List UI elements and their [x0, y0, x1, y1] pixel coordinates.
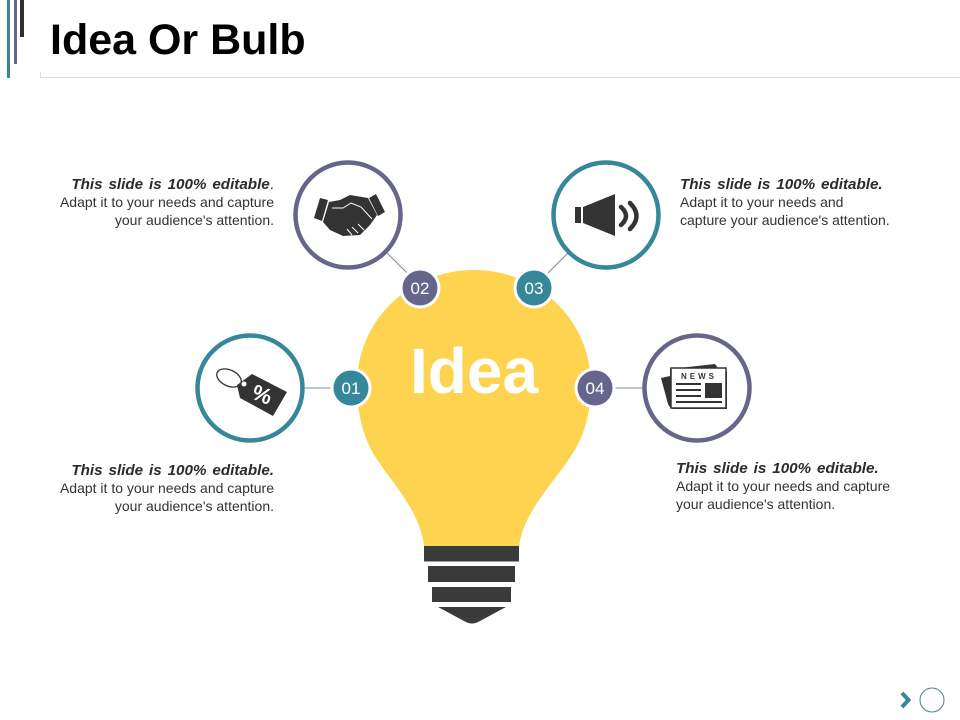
bulb base	[424, 546, 519, 624]
text block: 03	[680, 176, 890, 228]
text block: 03: This slide is 100% editable.	[680, 176, 883, 193]
bulb label: Idea	[410, 335, 538, 407]
circle: megaphone speaker	[554, 162, 658, 268]
text block: 04	[676, 460, 890, 512]
text block: 04: your audience's attention.	[676, 496, 835, 512]
title: Idea Or Bulb	[50, 16, 306, 64]
text block: 04: Adapt it to your needs and capture	[676, 478, 890, 494]
text block: 03: capture your audience's attention.	[680, 212, 890, 228]
text block: 01: Adapt it to your needs and capture	[60, 480, 274, 496]
title underline	[40, 72, 960, 78]
header accent bars	[7, 0, 24, 78]
circle: price tag	[198, 336, 302, 440]
badge 04	[576, 369, 614, 407]
text block: 02: your audience's attention.	[115, 212, 274, 228]
circle: newspaper	[644, 336, 750, 440]
badge 03: 03	[525, 279, 543, 298]
text block: 02	[60, 176, 274, 228]
connector lines	[305, 252, 643, 388]
circle: handshake	[296, 162, 400, 268]
badge 03	[515, 269, 553, 307]
badge 02	[401, 269, 439, 307]
icon: nav circle	[920, 688, 944, 712]
text block: 02: This slide is 100% editable.	[71, 176, 274, 193]
icon: handshake	[314, 194, 385, 236]
text block: 03: Adapt it to your needs and	[680, 194, 843, 210]
icon: newspaper: NEWS	[681, 372, 717, 381]
text block: 04: This slide is 100% editable.	[676, 460, 879, 477]
icon: price tag: %	[249, 379, 276, 410]
badge 02: 02	[411, 279, 429, 298]
text block: 01: This slide is 100% editable.	[71, 462, 274, 479]
icon: chevron	[902, 693, 908, 707]
text block: 01	[60, 462, 274, 514]
text block: 01: your audience's attention.	[115, 498, 274, 514]
badge 01: 01	[342, 379, 360, 398]
navigation icons	[900, 688, 944, 712]
bulb glass	[357, 270, 591, 546]
text block: 02: Adapt it to your needs and capture	[60, 194, 274, 210]
badge 01	[332, 369, 370, 407]
icon: speaker	[575, 194, 636, 236]
badge 04: 04	[586, 379, 604, 398]
light bulb	[357, 270, 591, 624]
